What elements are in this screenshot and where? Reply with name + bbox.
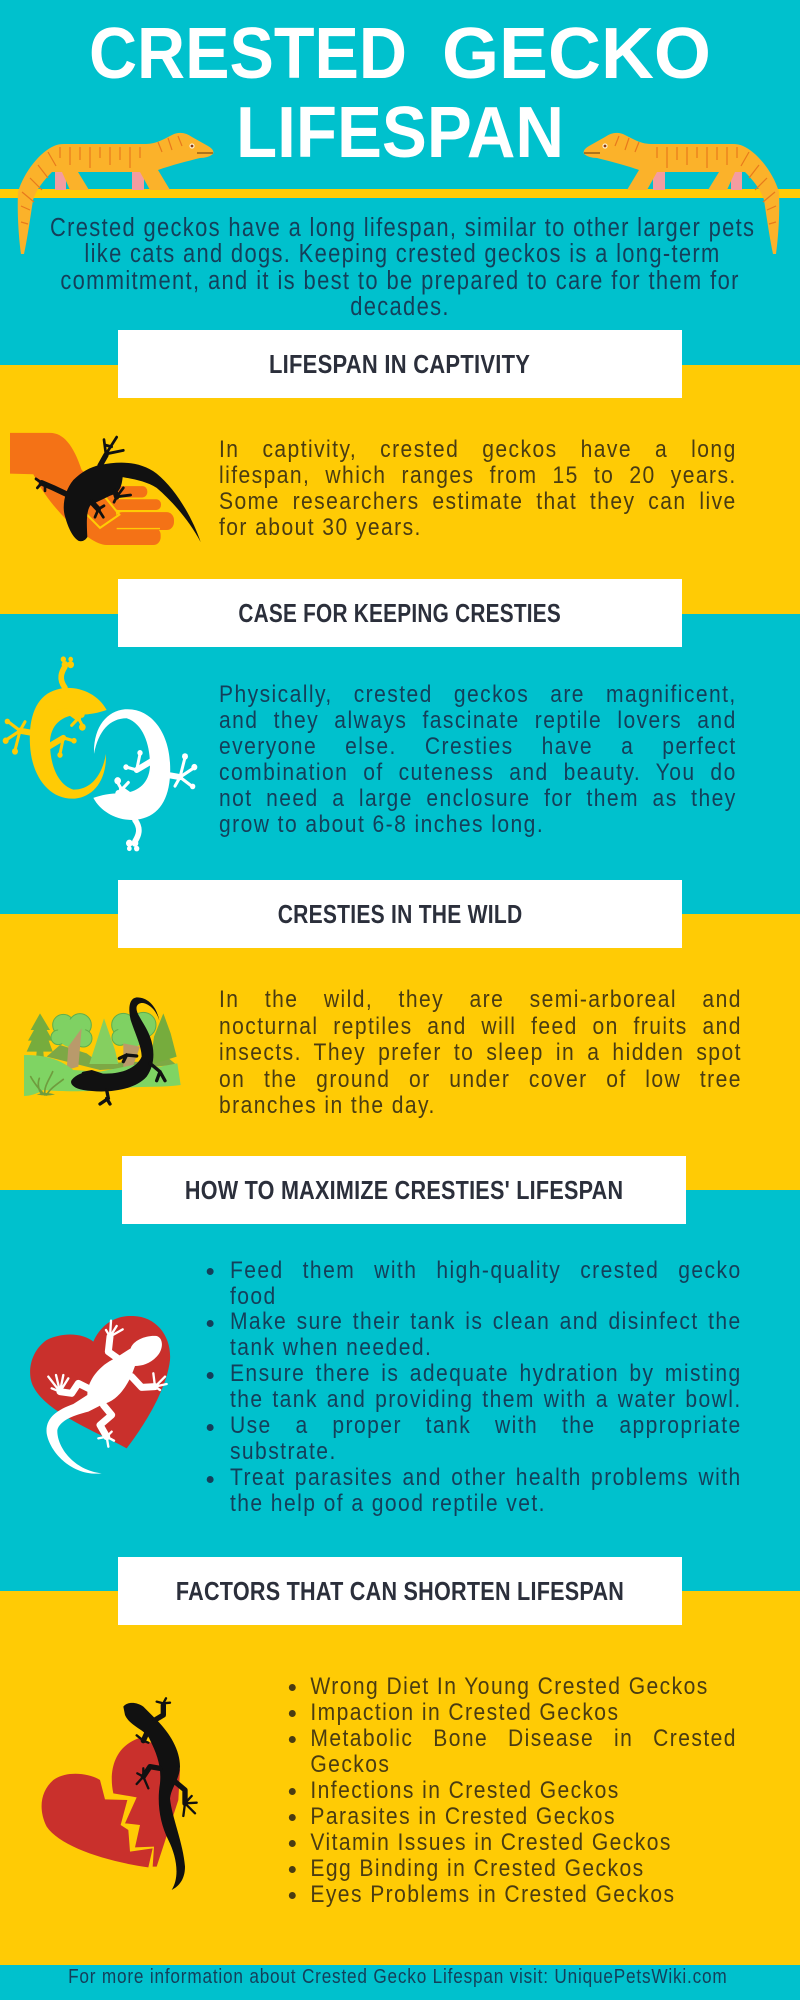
list: maximize lifespan tips	[206, 1257, 742, 1517]
icon: right orange gecko on rail	[584, 132, 780, 254]
heading: how to maximize lifespan	[122, 1156, 686, 1224]
list: factors that shorten lifespan: Parasites in Crested Geckos	[310, 1803, 616, 1830]
intro text: decades.	[350, 293, 450, 321]
icon: black gecko on broken heart	[42, 1697, 198, 1890]
text: wild paragraph: insects. They prefer to sleep in a hidden spot	[219, 1039, 742, 1066]
heading: lifespan in captivity: LIFESPAN IN CAPTIVITY	[269, 349, 531, 379]
heading: case for keeping cresties	[118, 579, 682, 647]
list: factors that shorten lifespan: Infections in Crested Geckos	[310, 1777, 620, 1804]
list: maximize lifespan tips: Feed them with high-quality crested gecko	[230, 1257, 742, 1284]
text: captivity paragraph: for about 30 years.	[219, 514, 422, 541]
list: maximize lifespan tips: tank when needed.	[230, 1334, 432, 1361]
intro text: commitment, and it is best to be prepared to care for them for	[60, 267, 740, 295]
heading: how to maximize lifespan: HOW TO MAXIMIZE CRESTIES' LIFESPAN	[185, 1175, 623, 1205]
intro text: Crested geckos have a long lifespan, similar to other larger pets	[50, 214, 755, 242]
text: wild paragraph: branches in the day.	[219, 1092, 436, 1119]
icon: salamander in forest	[24, 997, 181, 1106]
intro text	[50, 214, 755, 321]
icon: left orange gecko on rail	[18, 132, 214, 254]
title: LIFESPAN	[236, 93, 564, 173]
text: wild paragraph: nocturnal reptiles and will feed on fruits and	[219, 1013, 742, 1040]
list: maximize lifespan tips: the help of a good reptile vet.	[230, 1490, 546, 1517]
text: keeping cresties paragraph	[219, 681, 737, 838]
text: keeping cresties paragraph: combination of cuteness and beauty. You do	[219, 759, 737, 786]
list: maximize lifespan tips: substrate.	[230, 1438, 337, 1465]
list: factors that shorten lifespan: Impaction in Crested Geckos	[310, 1699, 619, 1726]
footer: For more information about Crested Gecko Lifespan visit: UniquePetsWiki.com	[68, 1966, 727, 1988]
text: captivity paragraph	[219, 436, 737, 541]
title	[89, 14, 711, 173]
list: maximize lifespan tips: Treat parasites and other health problems with	[230, 1464, 742, 1491]
icon: yellow and white geckos	[2, 656, 198, 852]
list: factors that shorten lifespan: Metabolic Bone Disease in Crested	[310, 1725, 737, 1752]
text: wild paragraph: In the wild, they are semi-arboreal and	[219, 986, 742, 1013]
text: keeping cresties paragraph: not need a large enclosure for them as they	[219, 785, 737, 812]
list: factors that shorten lifespan: Egg Binding in Crested Geckos	[310, 1855, 645, 1882]
icon: gecko on orange hand	[10, 432, 201, 545]
list: maximize lifespan tips: Make sure their tank is clean and disinfect the	[230, 1308, 742, 1335]
heading: cresties in the wild	[118, 880, 682, 948]
list: maximize lifespan tips: the tank and providing them with a water bowl.	[230, 1386, 742, 1413]
heading: factors that can shorten lifespan	[118, 1557, 682, 1625]
list: maximize lifespan tips: Use a proper tank with the appropriate	[230, 1412, 742, 1439]
text: keeping cresties paragraph: everyone else. Cresties have a perfect	[219, 733, 737, 760]
heading: cresties in the wild: CRESTIES IN THE WILD	[278, 899, 522, 929]
yellow gecko	[3, 656, 107, 799]
white gecko	[93, 709, 197, 851]
text: keeping cresties paragraph: grow to about 6-8 inches long.	[219, 811, 544, 838]
text: keeping cresties paragraph: Physically, crested geckos are magnificent,	[219, 681, 737, 708]
text: wild paragraph	[219, 986, 742, 1119]
title: CRESTED	[89, 14, 407, 94]
list: factors that shorten lifespan: Eyes Problems in Crested Geckos	[310, 1881, 675, 1908]
list: factors that shorten lifespan: Wrong Diet In Young Crested Geckos	[310, 1673, 709, 1700]
title: GECKO	[442, 14, 711, 94]
intro text: like cats and dogs. Keeping crested geckos is a long-term	[84, 240, 721, 268]
list: factors that shorten lifespan: Vitamin Issues in Crested Geckos	[310, 1829, 672, 1856]
list: factors that shorten lifespan: Geckos	[310, 1751, 390, 1778]
icon: white gecko on red heart	[30, 1316, 170, 1474]
list: factors that shorten lifespan	[288, 1673, 737, 1908]
heading: factors that can shorten lifespan: FACTORS THAT CAN SHORTEN LIFESPAN	[176, 1576, 624, 1606]
heading: case for keeping cresties: CASE FOR KEEPING CRESTIES	[239, 598, 561, 628]
text: wild paragraph: on the ground or under cover of low tree	[219, 1066, 742, 1093]
text: captivity paragraph: lifespan, which ranges from 15 to 20 years.	[219, 462, 737, 489]
list: maximize lifespan tips: Ensure there is adequate hydration by misting	[230, 1360, 742, 1387]
list: maximize lifespan tips: food	[230, 1283, 277, 1310]
text: captivity paragraph: In captivity, crested geckos have a long	[219, 436, 737, 463]
heading: lifespan in captivity	[118, 330, 682, 398]
text: captivity paragraph: Some researchers estimate that they can live	[219, 488, 737, 515]
text: keeping cresties paragraph: and they always fascinate reptile lovers and	[219, 707, 737, 734]
